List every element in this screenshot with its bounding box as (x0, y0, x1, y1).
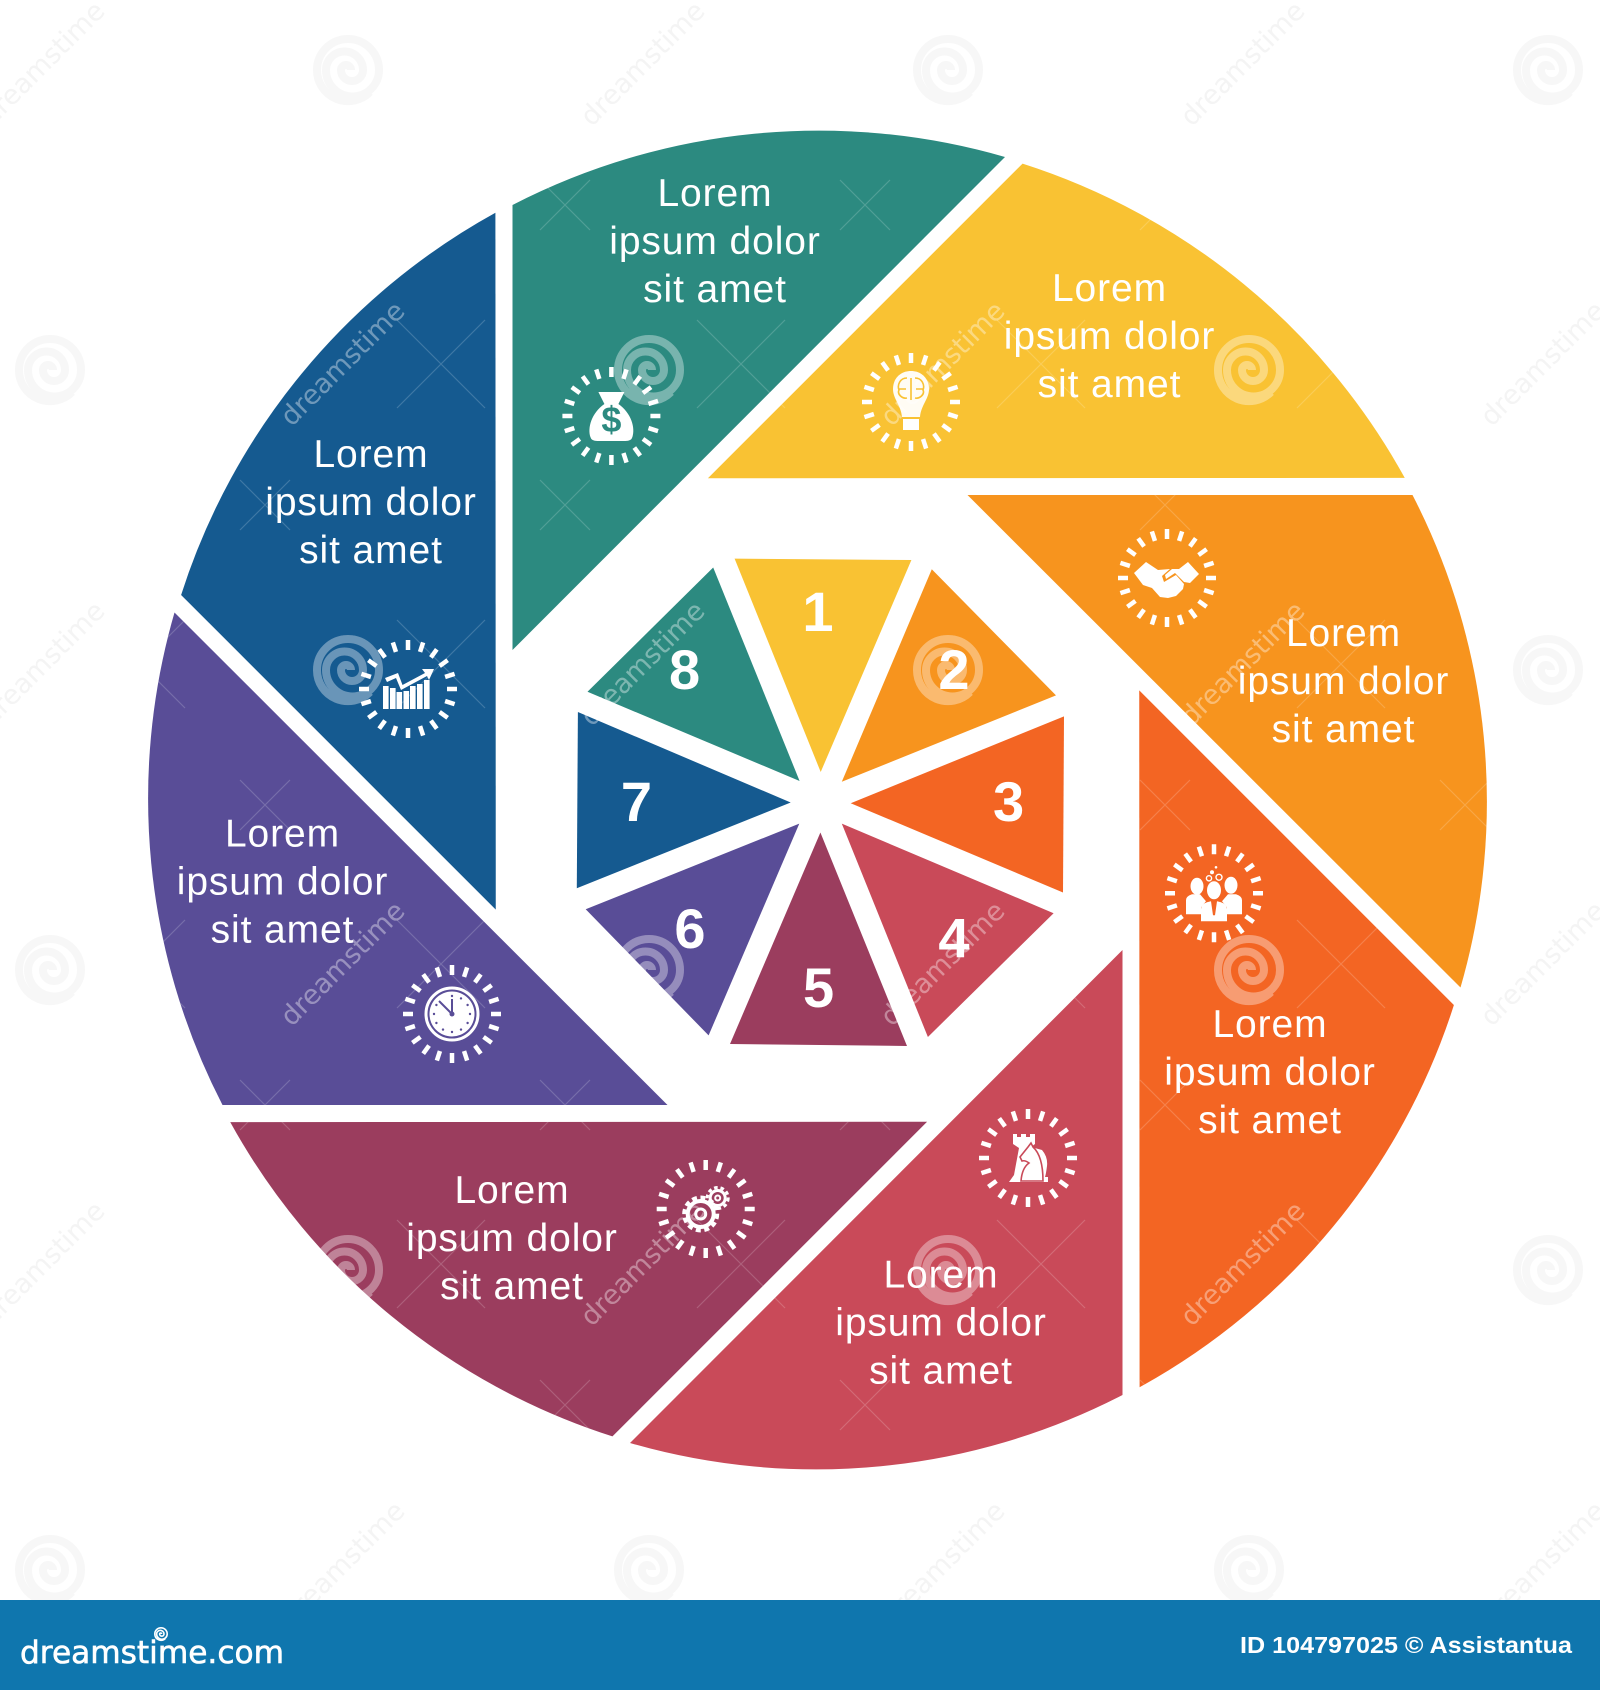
text block: orange: Lorem (1286, 612, 1401, 655)
text block: crimson: sit amet (869, 1350, 1013, 1392)
text block: purple: Lorem (225, 812, 340, 856)
panel: red-orange blade (791, 690, 1507, 1406)
text block: teal: ipsum dolor (609, 220, 821, 263)
text block: purple: ipsum dolor (177, 860, 388, 904)
watermark marks on coloured panels (158, 180, 1486, 1430)
panel: purple blade (148, 612, 667, 1105)
wedge 5 (730, 832, 907, 1046)
text block: purple: sit amet (211, 908, 354, 952)
text block: red-orange: ipsum dolor (1164, 1051, 1376, 1094)
watermark marks on coloured panels: dreamstime (1175, 1196, 1311, 1332)
number 5: 5 (803, 956, 834, 1019)
text block: blue (265, 433, 477, 572)
wedge 1 (735, 559, 911, 772)
watermark marks on coloured panels: dreamstime (875, 296, 1011, 432)
panel: yellow blade (708, 111, 1423, 827)
icon: bar chart with arrow (359, 640, 457, 738)
number 1: 1 (802, 580, 834, 643)
text block: yellow: sit amet (1038, 363, 1181, 406)
number 8: 8 (669, 638, 700, 701)
panel: crimson blade (630, 950, 1122, 1469)
numbers in the wedges (621, 580, 1024, 1019)
icon: clock (403, 965, 501, 1063)
text block: crimson: ipsum dolor (835, 1302, 1047, 1344)
text block: teal: Lorem (657, 172, 773, 215)
text block: blue: sit amet (299, 529, 443, 572)
watermark marks on coloured panels: dreamstime (1175, 596, 1311, 732)
wedge 3 (851, 716, 1064, 892)
text block: orange: sit amet (1272, 708, 1415, 751)
icon: money bag (562, 367, 660, 465)
wedge 6 (586, 824, 799, 1035)
panel: wine blade (212, 773, 927, 1489)
footer image id and credit: ID 104797025 © Assistantua (1240, 1632, 1572, 1658)
panel: teal blade (512, 131, 1005, 650)
text block: teal: sit amet (643, 268, 787, 311)
footer band (0, 1600, 1600, 1690)
text block: purple (177, 812, 388, 952)
icon: gears (657, 1160, 755, 1258)
text block: blue: ipsum dolor (265, 481, 477, 524)
wedge 4 (842, 824, 1054, 1037)
text block: orange: ipsum dolor (1238, 660, 1449, 703)
watermark marks on white background: dreamstime (875, 1496, 1011, 1632)
icon: team of three (1165, 844, 1263, 942)
text block: orange (1238, 612, 1449, 751)
text block: wine: Lorem (454, 1169, 570, 1212)
text block: wine: ipsum dolor (406, 1217, 618, 1260)
wedge 7 (577, 712, 791, 888)
inner octagon of numbered wedges (577, 559, 1064, 1046)
text block: teal (609, 172, 821, 311)
text block: crimson: Lorem (883, 1254, 999, 1296)
text block: crimson (835, 1254, 1047, 1392)
footer logo text: dreamstime.com (20, 1635, 284, 1671)
watermark marks on coloured panels: dreamstime (575, 596, 711, 732)
icon: chess rook and knight (979, 1109, 1077, 1207)
panel: blue blade (128, 194, 844, 910)
number 2: 2 (938, 638, 970, 701)
text block: yellow (1004, 267, 1215, 406)
wedge 8 (588, 568, 800, 781)
text block: blue: Lorem (313, 433, 429, 476)
icon: money bag: $ (601, 399, 621, 440)
watermark marks on coloured panels: dreamstime (875, 896, 1011, 1032)
outer ring of eight blades (128, 111, 1507, 1489)
wedge 2 (842, 569, 1056, 782)
number 4: 4 (938, 906, 970, 970)
watermark marks on coloured panels: dreamstime (575, 1196, 711, 1332)
text block: wine (406, 1169, 618, 1308)
watermark marks on coloured panels: dreamstime (275, 296, 411, 432)
icon: brain light bulb (862, 353, 960, 451)
text block: red-orange: sit amet (1198, 1099, 1342, 1142)
text block: red-orange: Lorem (1212, 1003, 1328, 1046)
text block: red-orange (1164, 1003, 1376, 1142)
watermark marks on white background: dreamstime (275, 1496, 411, 1632)
number 3: 3 (993, 770, 1024, 833)
number 7: 7 (621, 770, 652, 833)
number 6: 6 (674, 897, 706, 960)
text block: yellow: ipsum dolor (1004, 315, 1215, 358)
icon: handshake (1118, 529, 1216, 627)
text block: wine: sit amet (440, 1265, 584, 1308)
panel: orange blade (968, 495, 1487, 988)
text block: yellow: Lorem (1052, 267, 1167, 310)
watermark marks on coloured panels: dreamstime (275, 896, 411, 1032)
